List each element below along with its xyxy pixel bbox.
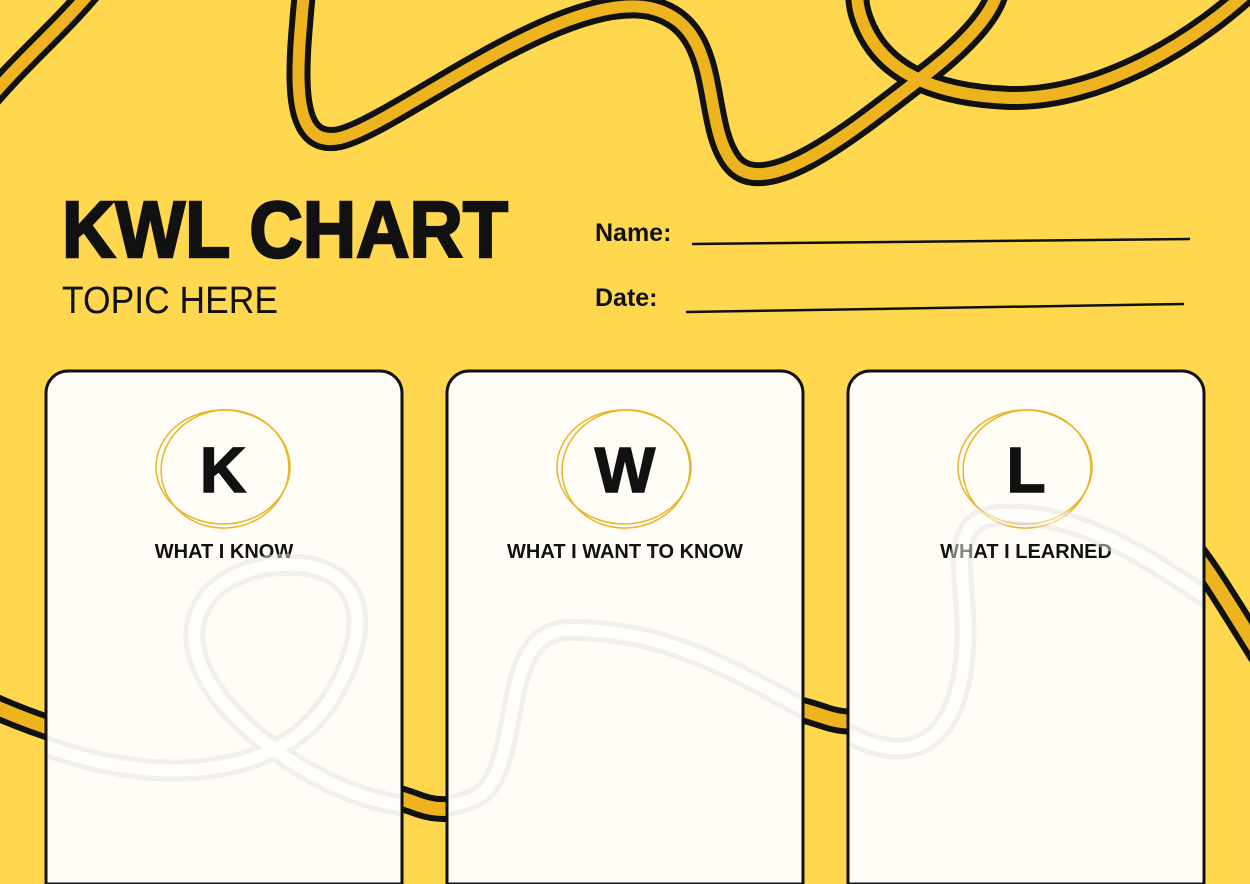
icon: K circle: K xyxy=(200,434,246,506)
icon: L circle xyxy=(955,402,1099,536)
name field: Name: xyxy=(595,219,671,247)
panel: K: WHAT I KNOW xyxy=(155,541,293,563)
icon: K circle xyxy=(153,402,297,536)
decorative faint ribbon inside cards xyxy=(30,515,1210,807)
panel: K xyxy=(46,371,402,884)
decorative ribbon bottom xyxy=(0,508,1250,809)
panel: W: WHAT I WANT TO KNOW xyxy=(507,541,743,563)
name field xyxy=(595,219,1190,247)
decorative ribbon top-left xyxy=(0,0,100,110)
date field: Date: xyxy=(595,284,658,312)
icon: W circle: W xyxy=(595,434,656,506)
panel: L xyxy=(848,371,1204,884)
date field xyxy=(595,284,1184,312)
icon: L circle: L xyxy=(1006,434,1046,506)
panel: W xyxy=(447,371,803,884)
panel: L: WHAT I LEARNED xyxy=(940,541,1112,563)
subtitle: TOPIC HERE xyxy=(62,280,278,322)
decorative ribbon top squiggle xyxy=(298,0,1250,174)
icon: W circle xyxy=(554,402,698,536)
title: KWL CHART xyxy=(62,185,508,274)
